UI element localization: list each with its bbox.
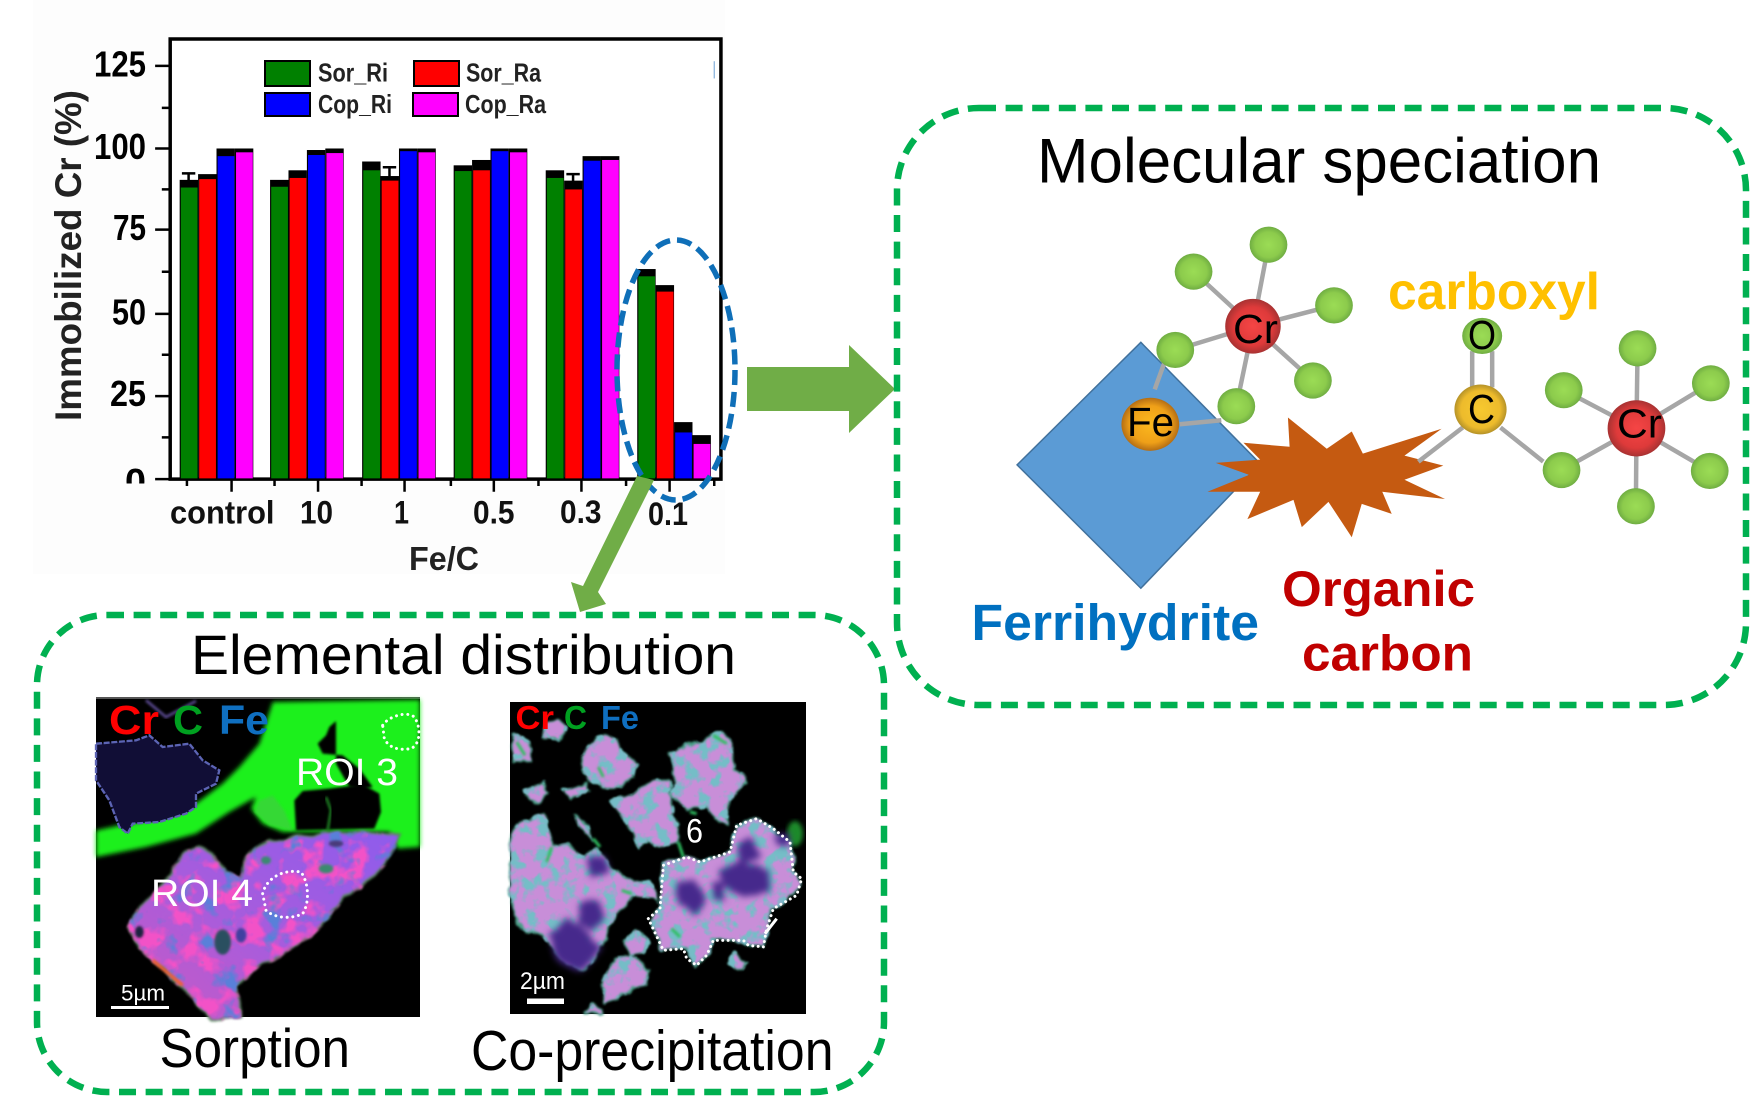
dotted ROI outlines: [263, 714, 419, 917]
panel: elemental distribution: [37, 615, 884, 1092]
image: sorption map: [96, 697, 420, 1017]
arrow: to elemental distribution: [571, 476, 654, 612]
legend: Cop_Ra: [465, 89, 546, 119]
x-axis tick labels: 1: [394, 494, 409, 530]
atom labels: C: [1468, 386, 1495, 432]
callout: dashed ellipse around Fe/C 0.1: [617, 240, 735, 500]
label: carboxyl: carboxyl: [1388, 263, 1600, 321]
map element labels: Cr: [516, 699, 554, 736]
atom labels: [1127, 306, 1662, 446]
legend: Sor_Ri: [318, 58, 388, 88]
y-axis tick labels: 0: [125, 461, 146, 502]
scale bar 5 µm: 5µm: [121, 980, 165, 1006]
map element labels: C: [564, 699, 587, 736]
map element labels: [516, 699, 639, 736]
y-axis title: Immobilized Cr (%): [48, 90, 89, 421]
map element labels: [109, 697, 269, 743]
atom labels: Fe: [1127, 399, 1174, 445]
y-axis tick labels: 25: [110, 373, 146, 414]
caption: co-precipitation: Co-precipitation: [471, 1019, 834, 1083]
ROI labels: [151, 752, 398, 915]
plot bars and axes: [155, 39, 721, 492]
Cr and Fe and C atoms: [1121, 299, 1665, 456]
x-axis title: Fe/C: [409, 540, 479, 577]
panel heading: Molecular speciation: [1037, 126, 1601, 196]
atom labels: Cr: [1617, 400, 1662, 446]
scale bar 5 µm: [111, 980, 169, 1009]
label: organic carbon: carbon: [1302, 626, 1473, 682]
image: co-precipitation map: [510, 699, 806, 1014]
atom labels: Cr: [1233, 306, 1278, 352]
bonds: [1155, 245, 1711, 506]
legend: Cop_Ri: [318, 89, 392, 119]
molecular diagram: [1017, 227, 1730, 588]
caption: sorption: Sorption: [160, 1017, 350, 1079]
label: organic carbon: Organic: [1282, 561, 1475, 617]
bar chart: immobilized Cr vs Fe/C: [48, 39, 721, 577]
ROI labels: ROI 4: [151, 873, 253, 915]
y-axis tick labels: 50: [112, 292, 146, 332]
map element labels: C: [173, 697, 203, 743]
map element labels: Fe: [601, 699, 639, 736]
legend: Sor_Ra: [466, 58, 541, 88]
atom labels: O: [1468, 312, 1496, 358]
x-axis tick labels: 0.1: [648, 496, 688, 532]
panel heading: Elemental distribution: [191, 623, 736, 686]
ROI labels: ROI 3: [296, 752, 398, 794]
x-axis tick labels: 0.5: [473, 494, 514, 530]
label: ferrihydrite: Ferrihydrite: [972, 594, 1259, 651]
dotted ROI 6 outline: [648, 819, 802, 965]
map element labels: Cr: [109, 697, 159, 743]
panel border: [37, 615, 884, 1092]
ligand atoms: [1156, 227, 1730, 524]
y-axis tick labels: 75: [113, 207, 146, 248]
y-axis tick labels: 100: [94, 126, 146, 167]
legend: [265, 58, 546, 119]
scale bar 2 µm: 2µm: [520, 968, 565, 995]
arrow: to molecular speciation: [747, 345, 895, 433]
x-axis tick labels: [170, 494, 688, 532]
label: organic carbon: [1282, 561, 1475, 682]
panel border: [897, 108, 1746, 705]
y-axis tick labels: 125: [94, 44, 146, 84]
x-axis tick labels: control: [170, 494, 274, 530]
ROI number: 6: [686, 812, 703, 850]
panel: molecular speciation: [897, 108, 1746, 705]
y-axis tick labels: [94, 44, 146, 502]
map element labels: Fe: [219, 697, 269, 743]
organic carbon burst: [1207, 417, 1445, 537]
x-axis tick labels: 0.3: [560, 494, 602, 530]
ferrihydrite diamond: [1017, 342, 1260, 588]
x-axis tick labels: 10: [300, 494, 333, 530]
